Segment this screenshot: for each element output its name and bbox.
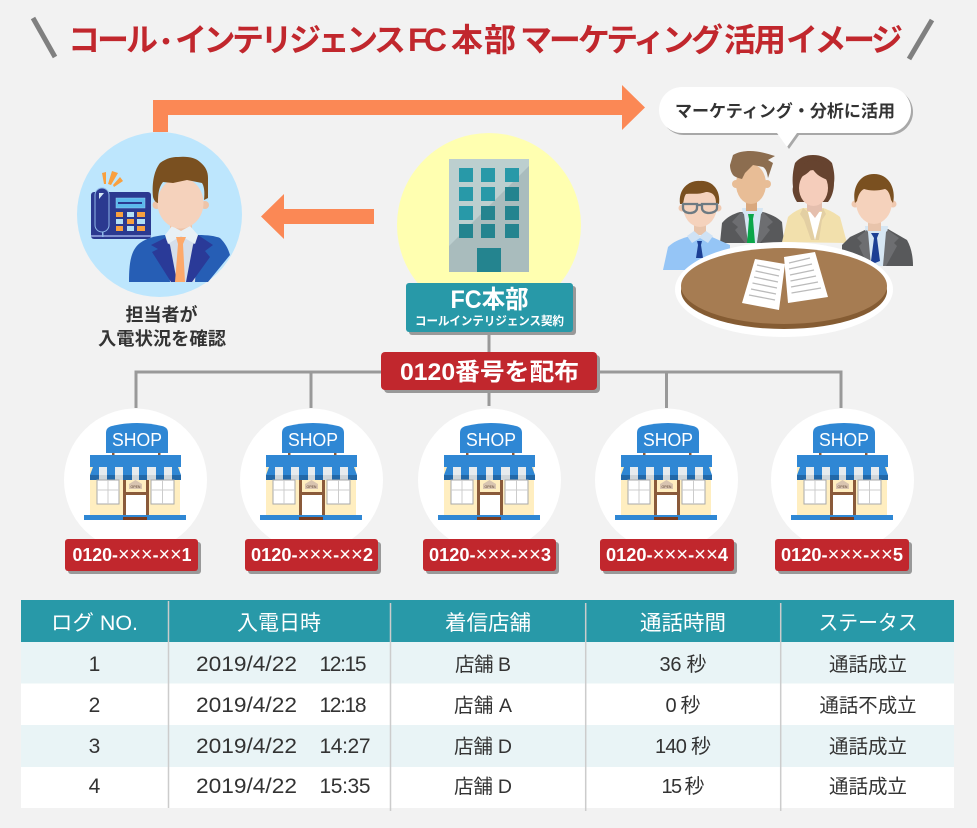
arrow: to marketing — [153, 85, 645, 132]
table header: 着信店舗 — [445, 612, 531, 635]
icon: man with glasses — [663, 181, 730, 270]
icon: woman in beige jacket — [782, 155, 847, 243]
title — [33, 18, 932, 59]
panel: shop 2 — [240, 408, 383, 552]
table row 4: 4 — [89, 775, 101, 798]
table row 4: 2019/4/22 — [196, 775, 297, 798]
panel: marketing speech bubble: マーケティング・分析に活用 — [675, 101, 895, 121]
label: FC headquarters: FC本部 — [450, 286, 528, 314]
table header — [21, 600, 954, 642]
table row 3: 通話成立 — [829, 736, 907, 758]
table header: 入電日時 — [237, 612, 321, 635]
label: contact person — [98, 304, 226, 349]
label: shop 4 number — [600, 539, 737, 574]
table row 1 — [89, 653, 907, 676]
panel: shop 4 — [595, 408, 738, 552]
table row 2: 0 秒 — [666, 694, 700, 717]
label: shop 3 number — [423, 539, 559, 574]
icon: shop 2 — [260, 423, 362, 520]
table: call log — [21, 600, 954, 811]
table header: ステータス — [818, 612, 918, 635]
icon: shop 1: OPEN — [131, 485, 141, 489]
panel: shop 1 — [64, 408, 207, 552]
label: contact person: 担当者が — [126, 304, 198, 325]
title: ・ — [153, 27, 179, 57]
icon: telephone — [91, 171, 151, 239]
label: FC headquarters — [406, 283, 576, 335]
icon: shop 1: SHOP — [112, 430, 162, 450]
icon: shop 5: SHOP — [819, 430, 869, 450]
label: shop 2 number — [245, 539, 381, 574]
icon: documents — [742, 252, 828, 310]
title: 活用 — [724, 22, 786, 58]
label: shop 2 number: 0120-×××-××2 — [251, 544, 373, 566]
icon: shop 2: OPEN — [307, 485, 317, 489]
table row 1: 通話成立 — [829, 654, 907, 676]
table row 3: 140 秒 — [655, 735, 711, 758]
title: コール — [68, 22, 158, 58]
label: shop 4 number: 0120-×××-××4 — [606, 544, 728, 566]
table header: 通話時間 — [640, 612, 726, 635]
table row 3: 店舗 D — [454, 736, 512, 758]
icon: shop 4: OPEN — [662, 485, 672, 489]
arrow: to contact person — [261, 194, 374, 239]
label: number distribution — [381, 352, 600, 393]
label: shop 5 number: 0120-×××-××5 — [781, 544, 903, 566]
table row 2: 2019/4/22 — [196, 694, 297, 717]
table row 2 — [89, 694, 916, 717]
table header: ログ NO. — [51, 612, 138, 635]
table row 3: 3 — [89, 735, 100, 758]
icon: man with green tie — [720, 151, 784, 243]
panel: contact person — [77, 132, 242, 297]
title: マーケティング — [520, 22, 723, 58]
label: shop 1 number — [65, 539, 201, 574]
icon: shop 3 — [438, 423, 540, 520]
table row 1: 店舗 B — [455, 654, 511, 676]
icon: shop 3: OPEN — [485, 485, 495, 489]
icon: shop 2: SHOP — [288, 430, 338, 450]
table row 2: 2 — [89, 694, 100, 717]
title: イメージ — [786, 22, 903, 58]
table row 4: 15:35 — [320, 775, 370, 798]
table row 1: 1 — [89, 653, 100, 676]
icon: shop 5: OPEN — [838, 485, 848, 489]
label: shop 1 number: 0120-×××-××1 — [72, 544, 191, 566]
table row 2: 12:18 — [320, 694, 366, 717]
label: shop 3 number: 0120-×××-××3 — [429, 544, 551, 566]
icon: shop 4: SHOP — [643, 430, 693, 450]
label: shop 5 number — [775, 539, 912, 574]
table row 3 — [89, 735, 907, 758]
panel: headquarters building — [397, 133, 581, 317]
table row 3: 2019/4/22 — [196, 735, 297, 758]
title: FC — [408, 22, 447, 58]
panel: shop 3 — [418, 408, 561, 552]
icon: shop 3: SHOP — [466, 430, 516, 450]
title: 本部 — [451, 22, 516, 58]
table row 2: 店舗 A — [454, 695, 512, 717]
table row 4: 店舗 D — [454, 776, 512, 798]
table row 3: 14:27 — [320, 735, 370, 758]
table row 1: 12:15 — [320, 653, 366, 676]
icon: meeting table — [675, 242, 893, 337]
icon: man with navy tie — [842, 174, 913, 266]
label: number distribution: 0120番号を配布 — [400, 359, 579, 386]
panel: meeting team — [663, 151, 913, 337]
table row 4: 15 秒 — [662, 775, 704, 798]
title: インテリジェンス — [175, 22, 406, 58]
icon: shop 4 — [615, 423, 717, 520]
table row 1: 36 秒 — [660, 653, 706, 676]
panel: marketing speech bubble — [659, 87, 913, 149]
icon: man with orange tie — [129, 157, 230, 282]
distribution tree lines — [136, 332, 841, 408]
table row 2: 通話不成立 — [820, 695, 916, 717]
table row 1: 2019/4/22 — [196, 653, 297, 676]
label: contact person: 入電状況を確認 — [98, 329, 226, 349]
table row 4 — [89, 775, 907, 798]
icon: shop 5 — [791, 423, 893, 520]
table row 4: 通話成立 — [829, 776, 907, 798]
icon: shop 1 — [84, 423, 186, 520]
panel: shop 5 — [771, 408, 914, 552]
label: FC headquarters: コールインテリジェンス契約 — [415, 313, 564, 328]
